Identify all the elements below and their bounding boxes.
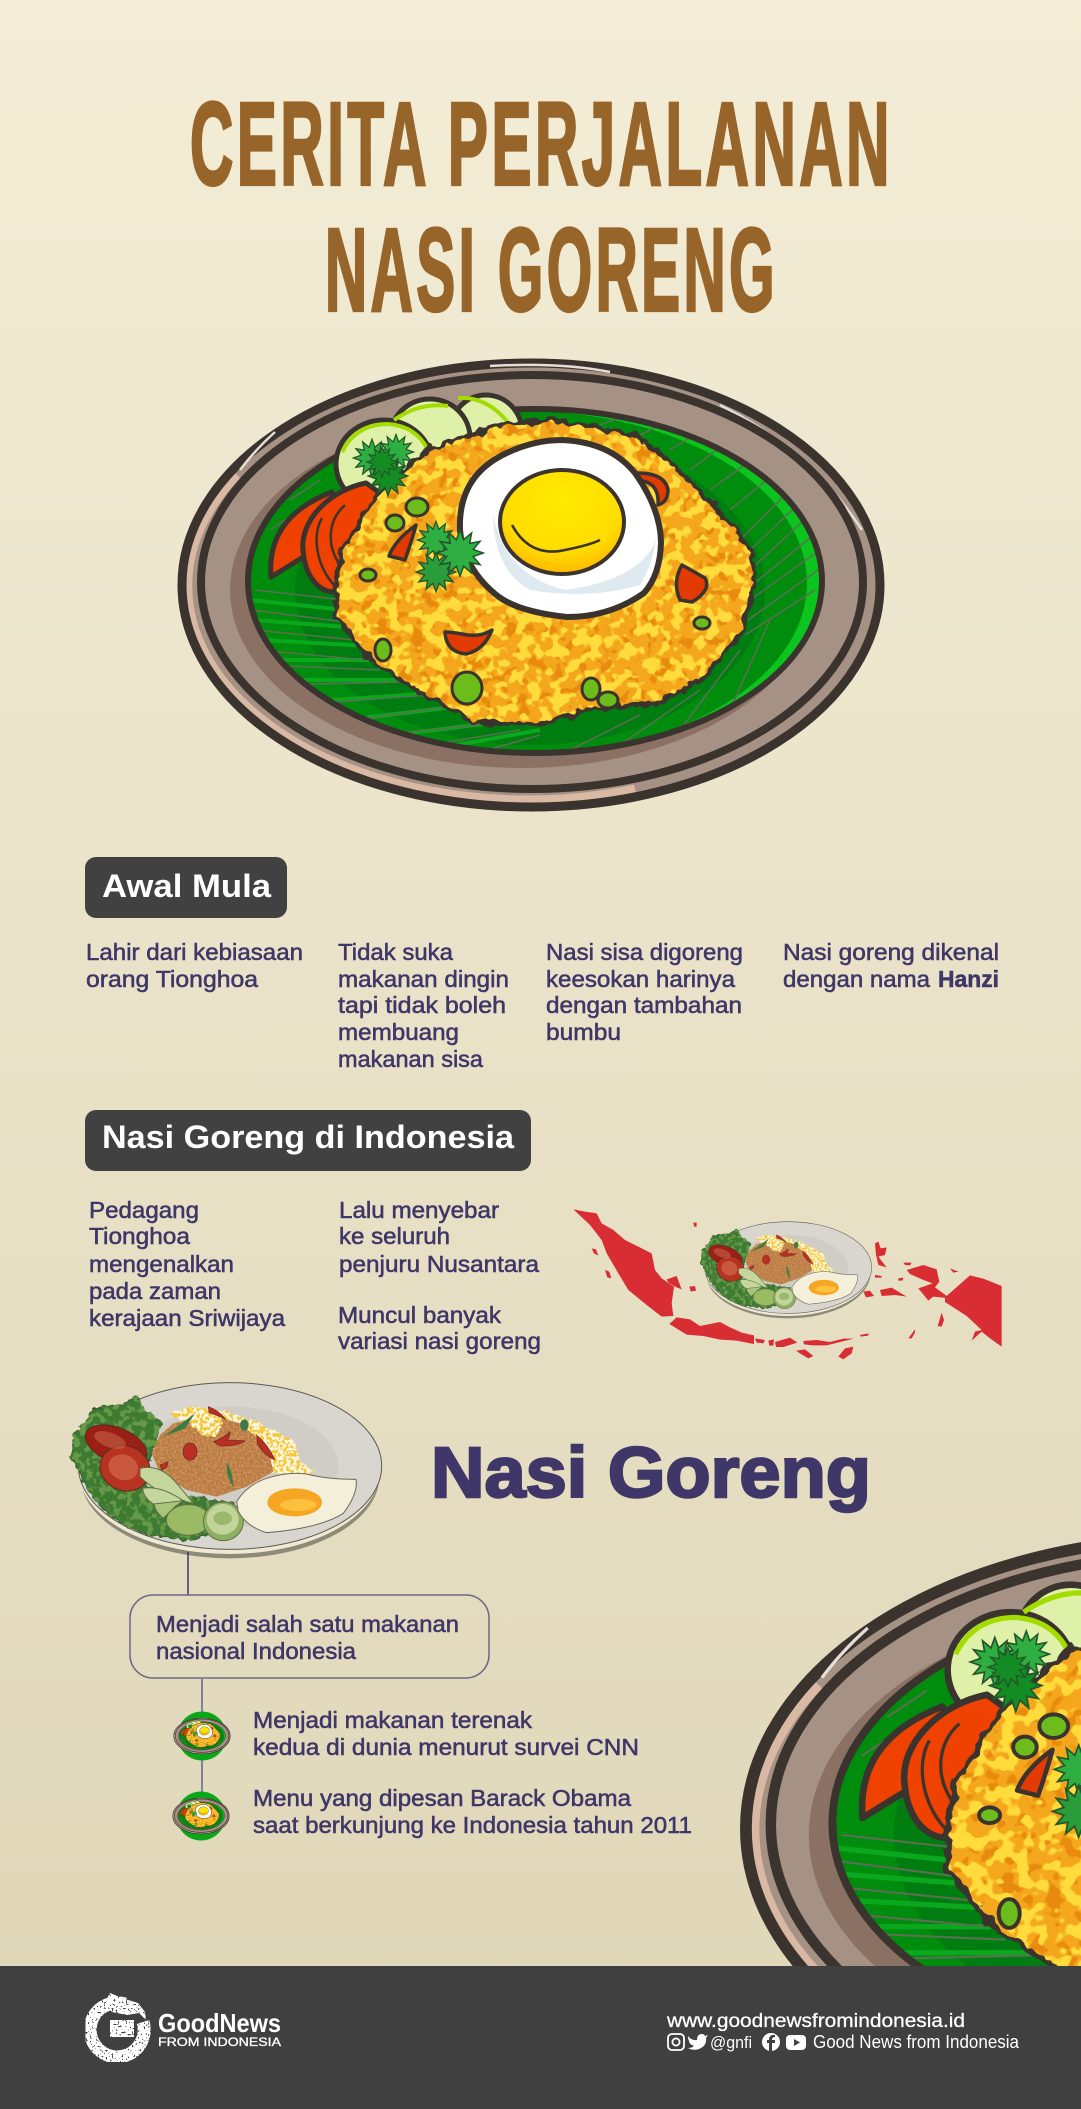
text: Pedagang Tionghoa: mengenalkan xyxy=(89,1251,234,1277)
map of Indonesia xyxy=(573,1209,1002,1359)
callout: makanan nasional: nasional Indonesia xyxy=(156,1638,356,1664)
heading: Awal Mula: Awal Mula xyxy=(102,868,271,904)
text: column 1: Lahir dari kebiasaan xyxy=(86,939,303,965)
callout: makanan nasional: Menjadi salah satu makanan xyxy=(156,1611,459,1637)
cucumber slices xyxy=(336,395,522,508)
footer bar xyxy=(0,1966,1081,2109)
text: Barack Obama: Menu yang dipesan Barack Obama xyxy=(253,1785,631,1811)
logo: GoodNews From Indonesia: FROM INDONESIA xyxy=(158,2037,281,2049)
text: column 2 xyxy=(338,939,509,1072)
text: Pedagang Tionghoa: Pedagang xyxy=(89,1197,199,1223)
fried egg xyxy=(237,1473,356,1533)
text: column 1 xyxy=(86,939,303,992)
chili pieces xyxy=(389,473,707,654)
tomato wedges xyxy=(271,483,380,592)
logo wordmark: GoodNews xyxy=(158,2008,281,2038)
text: Lalu menyebar xyxy=(339,1197,539,1277)
text: makanan terenak: kedua di dunia menurut survei CNN xyxy=(253,1734,639,1760)
callout: makanan nasional xyxy=(130,1595,489,1678)
heading: Nasi Goreng di Indonesia xyxy=(85,1110,531,1171)
cucumbers xyxy=(140,1467,243,1541)
chilies xyxy=(160,1407,275,1470)
peas xyxy=(360,498,710,708)
scrambled egg xyxy=(170,1407,315,1473)
text: column 3: bumbu xyxy=(546,1019,621,1045)
text: column 3: Nasi sisa digoreng xyxy=(546,939,743,965)
text: makanan terenak: Menjadi makanan terenak xyxy=(253,1707,533,1733)
social handles xyxy=(668,2032,1020,2052)
website: www.goodnewsfromindonesia.id xyxy=(666,2010,965,2032)
boiled egg xyxy=(460,440,661,617)
text: column 2: membuang xyxy=(338,1019,459,1045)
illustration: small plate on map xyxy=(701,1222,872,1318)
timeline line xyxy=(201,1678,203,1800)
fried rice xyxy=(337,422,751,723)
illustration: hero plate of nasi goreng xyxy=(182,363,880,807)
text: column 3 xyxy=(546,939,743,1045)
illustration: cropped large plate bottom right xyxy=(740,1542,1081,1966)
text: column 2: tapi tidak boleh xyxy=(338,992,506,1018)
text: Barack Obama xyxy=(253,1785,692,1838)
lettuce xyxy=(72,1395,237,1540)
text: Pedagang Tionghoa: Tionghoa xyxy=(89,1223,190,1249)
egg chunk on rice xyxy=(188,1413,223,1437)
heading: Awal Mula xyxy=(85,857,287,918)
icon: facebook xyxy=(762,2033,780,2051)
text: Lalu menyebar: ke seluruh xyxy=(339,1223,450,1249)
text: column 1: orang Tionghoa xyxy=(86,966,258,992)
text: Pedagang Tionghoa: pada zaman xyxy=(89,1278,221,1304)
social handles: @gnfi xyxy=(710,2033,752,2052)
text: Pedagang Tionghoa xyxy=(89,1197,285,1331)
text: column 2: makanan sisa xyxy=(338,1046,483,1072)
text: column 2: Tidak suka xyxy=(338,939,453,965)
text: column 4: Hanzi xyxy=(938,966,999,992)
icon: twitter xyxy=(688,2034,708,2050)
title xyxy=(190,78,893,336)
banana leaf xyxy=(239,409,822,755)
text: column 3: keesokan harinya xyxy=(546,966,735,992)
text: Muncul banyak: Muncul banyak xyxy=(338,1302,502,1328)
rice mound xyxy=(152,1415,273,1497)
plate xyxy=(78,1383,382,1558)
heading: Nasi Goreng di Indonesia: Nasi Goreng di Indonesia xyxy=(102,1119,514,1155)
parsley garnish xyxy=(353,434,483,592)
big label: Nasi Goreng: Nasi Goreng xyxy=(431,1434,871,1513)
text: column 4 xyxy=(783,939,999,992)
icon: instagram xyxy=(668,2034,684,2050)
text: Muncul banyak: variasi nasi goreng xyxy=(338,1328,541,1354)
plate rim xyxy=(182,363,880,807)
tomatoes xyxy=(80,1417,156,1498)
logo: GoodNews From Indonesia xyxy=(90,1993,281,2057)
logo mark xyxy=(90,1993,146,2057)
green herb xyxy=(163,1413,249,1487)
illustration: nasi goreng plate with egg xyxy=(72,1383,382,1558)
icon: plate bullet 1 xyxy=(174,1712,230,1760)
text: Lalu menyebar: Lalu menyebar xyxy=(339,1197,499,1223)
text: Lalu menyebar: penjuru Nusantara xyxy=(339,1251,539,1277)
social handles: Good News from Indonesia xyxy=(813,2032,1020,2052)
text: Barack Obama: saat berkunjung ke Indonesia tahun 2011 xyxy=(253,1812,692,1838)
text: column 3: dengan tambahan xyxy=(546,992,742,1018)
text: column 4: Nasi goreng dikenal xyxy=(783,939,999,965)
text: makanan terenak xyxy=(253,1707,639,1760)
text: column 2: makanan dingin xyxy=(338,966,509,992)
text: column 4: dengan nama xyxy=(783,966,930,992)
icon: plate bullet 2 xyxy=(173,1792,229,1840)
text: Muncul banyak xyxy=(338,1302,541,1354)
icon: youtube xyxy=(786,2035,806,2050)
connector line xyxy=(187,1552,189,1595)
text: Pedagang Tionghoa: kerajaan Sriwijaya xyxy=(89,1305,285,1331)
